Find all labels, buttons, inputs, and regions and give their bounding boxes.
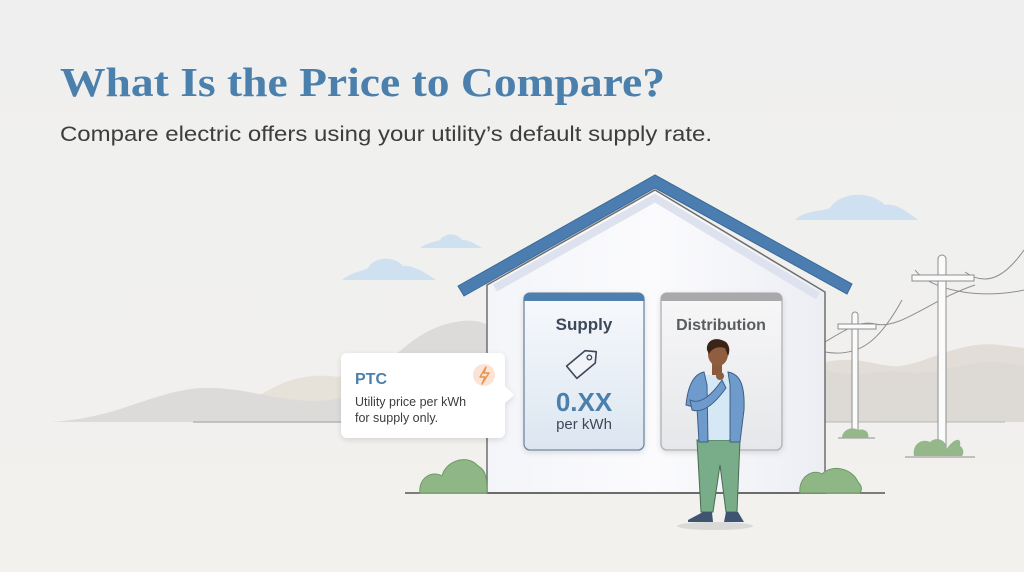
heading: distribution: Distribution <box>676 317 766 334</box>
bushes near house <box>420 460 861 493</box>
house <box>458 175 852 493</box>
background hills right <box>825 344 1024 422</box>
subtitle: Compare electric offers using your utility’s default supply rate. <box>60 123 712 146</box>
bushes at poles <box>842 428 963 456</box>
icon: price tag <box>567 346 601 378</box>
callout: PTC: PTC <box>355 371 387 388</box>
icon: lightning <box>473 364 495 386</box>
panel: distribution card <box>661 293 782 450</box>
value: 0.XX <box>556 387 613 417</box>
ground line <box>405 492 885 494</box>
clouds <box>342 195 918 280</box>
background hills left <box>50 321 487 422</box>
panel: supply card <box>524 293 644 450</box>
person <box>677 339 753 530</box>
roof <box>458 175 852 296</box>
callout: PTC <box>341 353 514 438</box>
callout: PTC: Utility price per kWh <box>355 395 466 409</box>
callout: PTC: for supply only. <box>355 411 438 425</box>
title: What Is the Price to Compare? <box>60 59 665 105</box>
panel: supply card: per kWh <box>556 416 612 433</box>
heading: supply: Supply <box>556 315 613 334</box>
power poles <box>825 250 1024 457</box>
